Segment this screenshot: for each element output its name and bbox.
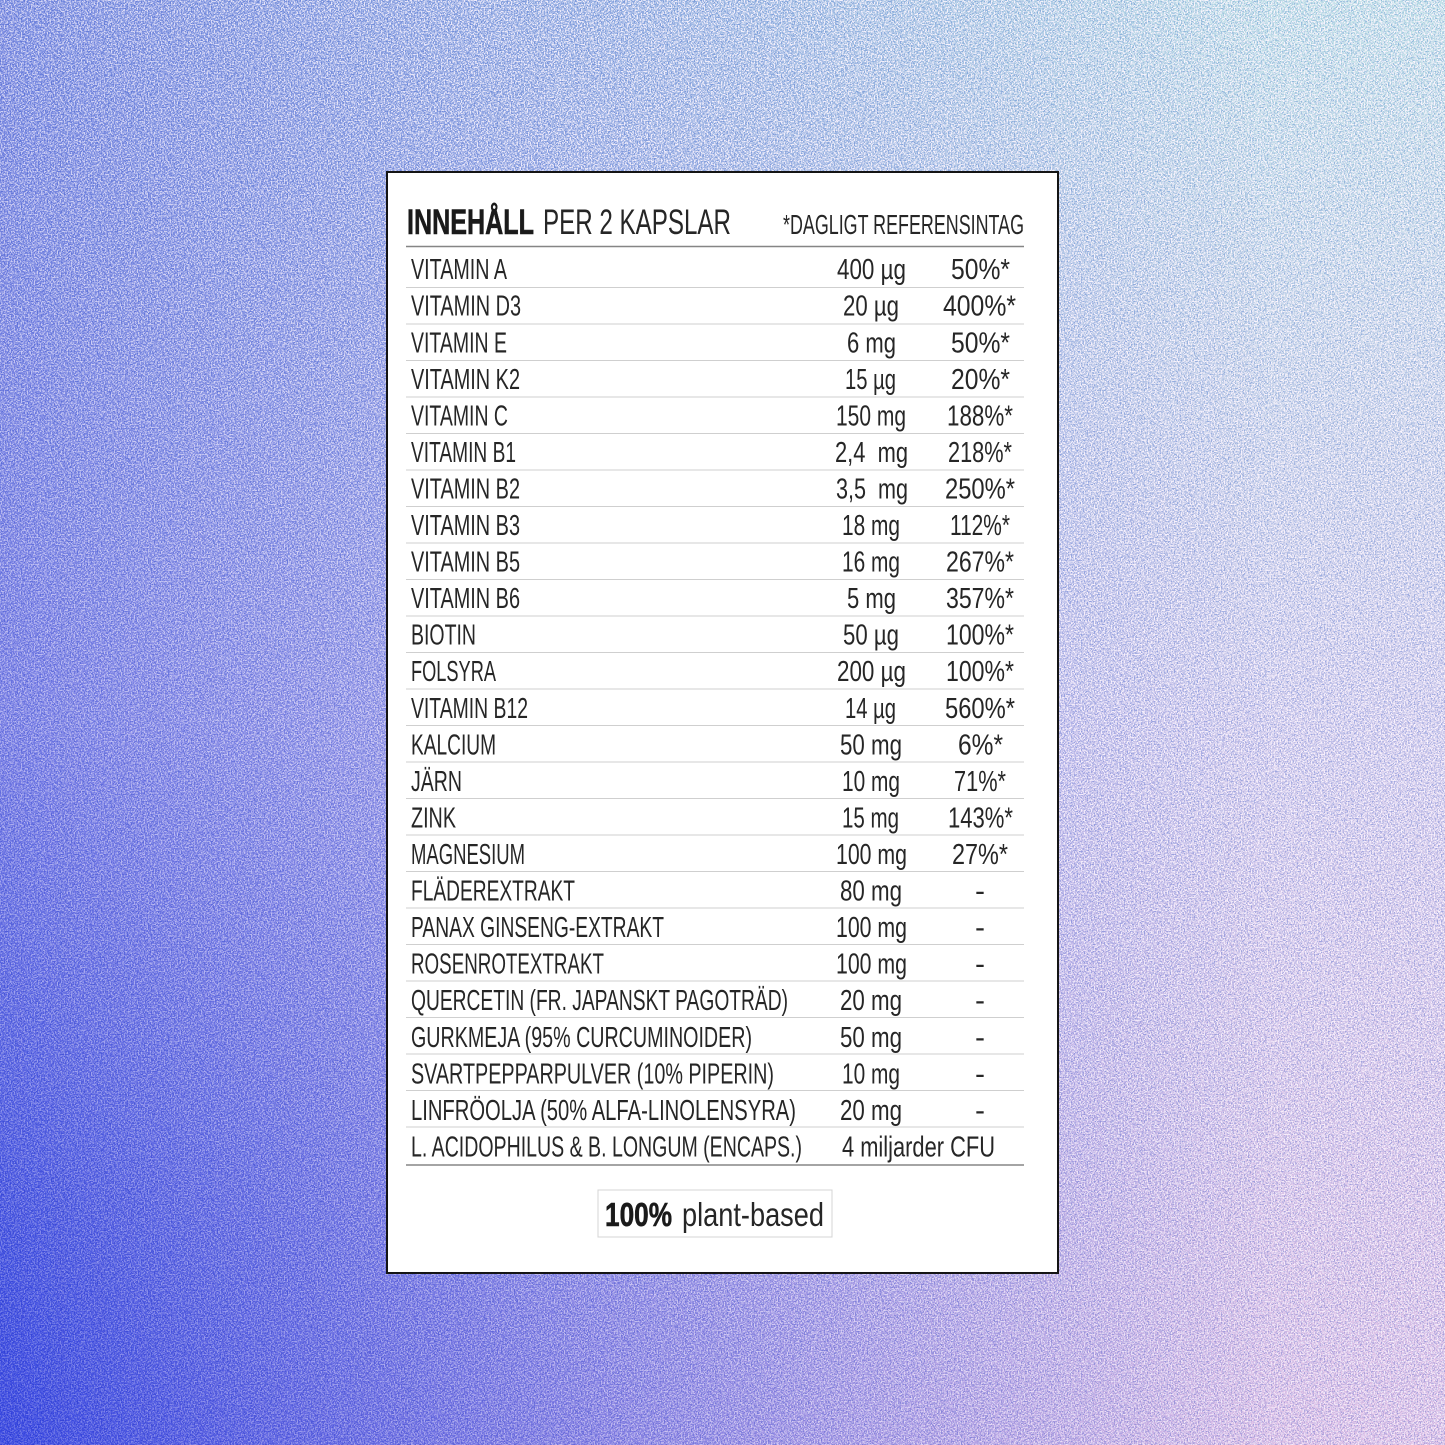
row: l. acidophilus and b. longum: L. ACIDOPHILUS & B. LONGUM (ENCAPS.) — [411, 1131, 802, 1163]
row: vitamin E: 6 mg — [847, 327, 896, 359]
row: biotin — [411, 620, 1014, 652]
row: vitamin B1: 2,4 mg — [835, 437, 908, 469]
row: linfröolja: LINFRÖOLJA (50% ALFA-LINOLENSYRA) — [411, 1095, 796, 1127]
row: rosenrotextrakt: - — [975, 949, 985, 981]
row: vitamin B6 — [411, 583, 1014, 615]
row: vitamin B2: 250%* — [945, 473, 1015, 505]
row: svartpepparpulver: - — [975, 1058, 985, 1090]
heading: innehåll per 2 kapslar: PER 2 KAPSLAR — [543, 203, 731, 242]
row: quercetin: QUERCETIN (FR. JAPANSKT PAGOTRÄD) — [411, 985, 788, 1017]
row: rosenrotextrakt: 100 mg — [836, 949, 907, 981]
row: vitamin K2 — [411, 364, 1010, 396]
row: svartpepparpulver: SVARTPEPPARPULVER (10% PIPERIN) — [411, 1058, 774, 1090]
row: quercetin: 20 mg — [840, 985, 902, 1017]
table: ingredients — [406, 254, 1024, 1163]
row: vitamin D3: VITAMIN D3 — [411, 291, 521, 323]
badge: 100% plant-based: plant-based — [682, 1196, 824, 1233]
row: vitamin B1: 218%* — [948, 437, 1012, 469]
row: vitamin D3: 20 µg — [843, 291, 899, 323]
row: vitamin B1 — [411, 437, 1012, 469]
row: magnesium — [411, 839, 1008, 871]
row: fläderextrakt: FLÄDEREXTRAKT — [411, 876, 575, 908]
row: zink: ZINK — [411, 802, 456, 834]
row: vitamin E: VITAMIN E — [411, 327, 507, 359]
row: vitamin C — [411, 400, 1013, 432]
row: järn: 71%* — [954, 766, 1006, 798]
heading: innehåll per 2 kapslar: INNEHÅLL — [407, 202, 534, 242]
row: vitamin A: 400 µg — [837, 254, 906, 286]
row: vitamin C: 188%* — [947, 400, 1013, 432]
row: vitamin B5 — [411, 547, 1014, 579]
row: vitamin B6: VITAMIN B6 — [411, 583, 520, 615]
row: vitamin B12 — [411, 693, 1015, 725]
row: zink: 143%* — [948, 802, 1013, 834]
row: panax ginseng-extrakt — [411, 912, 985, 944]
row: vitamin K2: VITAMIN K2 — [411, 364, 520, 396]
row: biotin: 50 µg — [843, 620, 899, 652]
column note: daily reference intake: *DAGLIGT REFERENSINTAG — [783, 209, 1024, 240]
row: magnesium: 27%* — [952, 839, 1008, 871]
row: vitamin E: 50%* — [951, 327, 1010, 359]
row: folsyra — [411, 656, 1014, 688]
row: vitamin B6: 357%* — [946, 583, 1014, 615]
row: panax ginseng-extrakt: PANAX GINSENG-EXTRAKT — [411, 912, 664, 944]
row: vitamin B3 — [411, 510, 1010, 542]
row: kalcium: KALCIUM — [411, 729, 496, 761]
row: vitamin A — [411, 254, 1010, 286]
row: vitamin B3: VITAMIN B3 — [411, 510, 520, 542]
row: panax ginseng-extrakt: - — [975, 912, 985, 944]
badge: 100% plant-based: 100% — [605, 1196, 672, 1233]
row: magnesium: MAGNESIUM — [411, 839, 525, 871]
row: vitamin B5: 16 mg — [842, 547, 900, 579]
row: folsyra: 100%* — [946, 656, 1014, 688]
row: vitamin C: 150 mg — [836, 400, 906, 432]
row: järn: JÄRN — [411, 766, 462, 798]
row: vitamin B3: 18 mg — [842, 510, 900, 542]
row: vitamin B5: VITAMIN B5 — [411, 547, 520, 579]
row: vitamin B5: 267%* — [946, 547, 1014, 579]
row: vitamin B2: 3,5 mg — [836, 473, 908, 505]
row: biotin: 100%* — [946, 620, 1014, 652]
row: gurkmeja: - — [975, 1022, 985, 1054]
badge: 100% plant-based — [598, 1190, 832, 1237]
row: vitamin A: VITAMIN A — [411, 254, 507, 286]
row: vitamin B12: VITAMIN B12 — [411, 693, 528, 725]
row: vitamin K2: 15 µg — [845, 364, 896, 396]
heading: innehåll per 2 kapslar — [407, 202, 731, 242]
row: kalcium — [411, 729, 1003, 761]
row: biotin: BIOTIN — [411, 620, 476, 652]
row: järn — [411, 766, 1006, 798]
row: vitamin E — [411, 327, 1010, 359]
row: l. acidophilus and b. longum: 4 miljarder CFU — [842, 1131, 995, 1163]
row: vitamin D3: 400%* — [943, 291, 1016, 323]
row: fläderextrakt: - — [975, 876, 985, 908]
row: vitamin B6: 5 mg — [847, 583, 896, 615]
row: vitamin C: VITAMIN C — [411, 400, 508, 432]
row: vitamin B2: VITAMIN B2 — [411, 473, 520, 505]
row: rosenrotextrakt: ROSENROTEXTRAKT — [411, 949, 604, 981]
row: vitamin B3: 112%* — [950, 510, 1010, 542]
row: vitamin A: 50%* — [951, 254, 1010, 286]
row: vitamin B1: VITAMIN B1 — [411, 437, 516, 469]
row: järn: 10 mg — [842, 766, 900, 798]
row: magnesium: 100 mg — [836, 839, 907, 871]
row: quercetin: - — [975, 985, 985, 1017]
row: gurkmeja: 50 mg — [840, 1022, 902, 1054]
row: fläderextrakt — [411, 876, 985, 908]
row: folsyra: FOLSYRA — [411, 656, 496, 688]
row: vitamin K2: 20%* — [951, 364, 1010, 396]
row: linfröolja: 20 mg — [840, 1095, 902, 1127]
row: vitamin B2 — [411, 474, 1015, 506]
row: fläderextrakt: 80 mg — [840, 876, 902, 908]
row: zink — [411, 802, 1013, 834]
row: kalcium: 6%* — [958, 729, 1003, 761]
row: gurkmeja: GURKMEJA (95% CURCUMINOIDER) — [411, 1022, 752, 1054]
row: vitamin D3 — [411, 291, 1016, 323]
row: zink: 15 mg — [842, 802, 899, 834]
row: kalcium: 50 mg — [840, 729, 902, 761]
row: rosenrotextrakt — [411, 949, 985, 981]
panel: nutrition table card — [387, 172, 1058, 1273]
row: linfröolja: - — [975, 1095, 985, 1127]
row: vitamin B12: 14 µg — [845, 693, 896, 725]
row: vitamin B12: 560%* — [945, 693, 1015, 725]
row: svartpepparpulver: 10 mg — [842, 1058, 900, 1090]
row: panax ginseng-extrakt: 100 mg — [836, 912, 907, 944]
row: folsyra: 200 µg — [837, 656, 906, 688]
